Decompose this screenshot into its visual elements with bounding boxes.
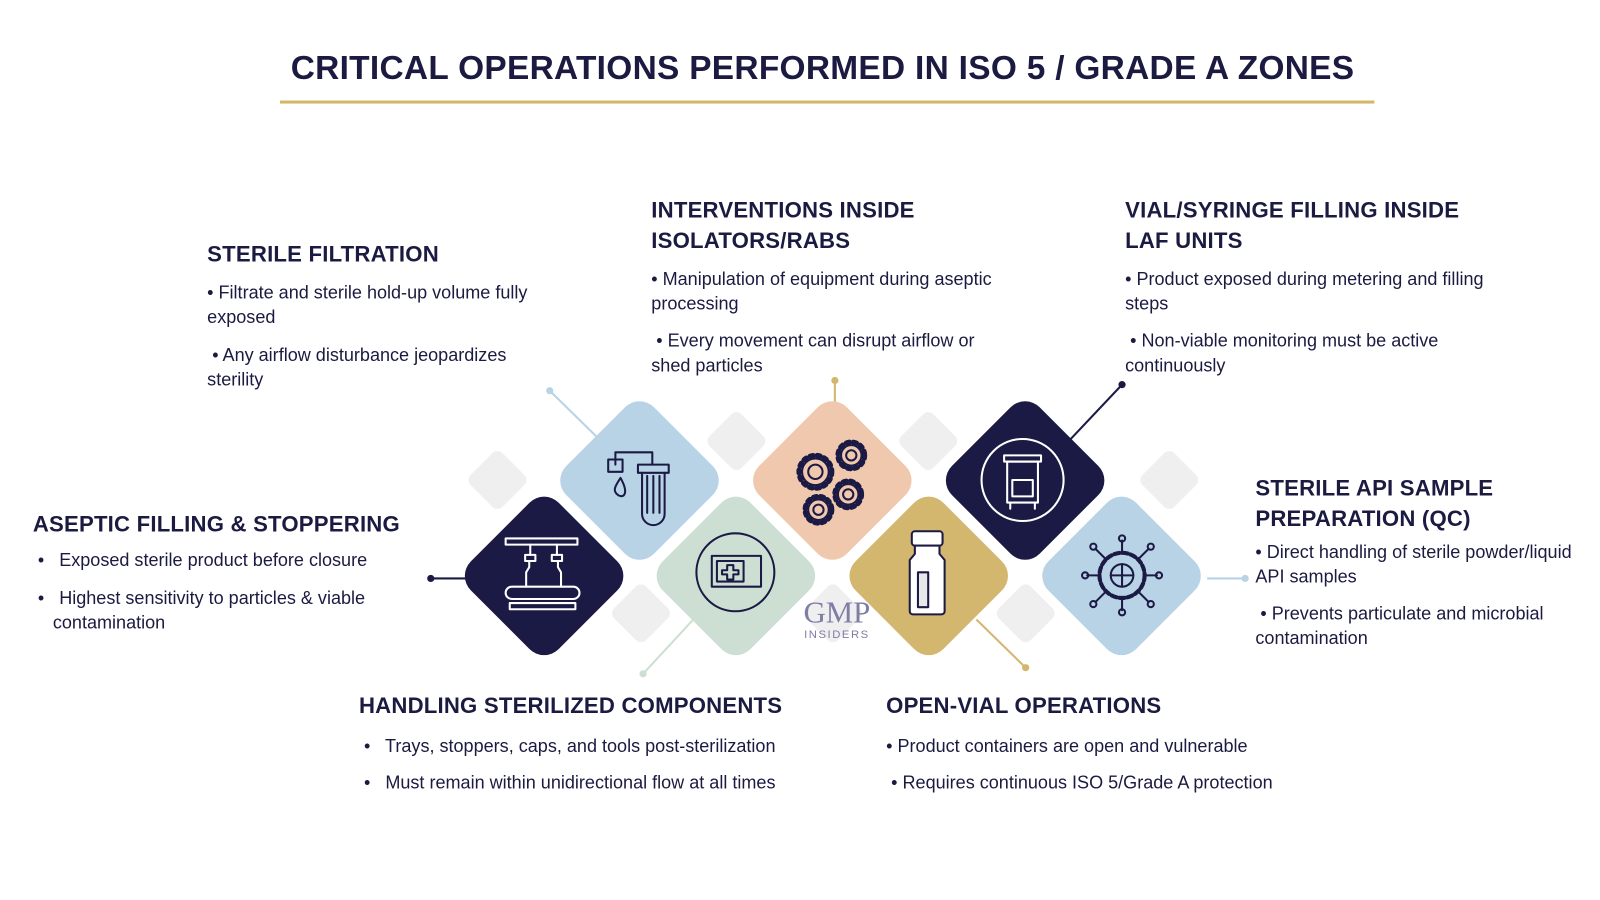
text: handling components	[359, 692, 782, 793]
icon: globe network	[1082, 535, 1162, 615]
text: sterile api: contamination	[1255, 628, 1368, 648]
icon: vial	[910, 531, 945, 614]
text: sterile filtration: sterility	[207, 369, 263, 390]
text: open-vial	[886, 692, 1273, 793]
text: open-vial: • Product containers are open and vulnerable	[886, 735, 1248, 756]
title underline	[280, 101, 1374, 104]
text: vial/syringe filling: VIAL/SYRINGE FILLING INSIDE	[1125, 197, 1459, 223]
text: vial/syringe filling: • Product exposed during metering and filling	[1125, 269, 1484, 289]
text: sterile filtration: STERILE FILTRATION	[207, 241, 439, 267]
text: interventions: INTERVENTIONS INSIDE	[651, 197, 915, 223]
diamond: handling components (green)	[648, 488, 824, 664]
text: sterile api: PREPARATION (QC)	[1255, 506, 1471, 531]
text: vial/syringe filling: steps	[1125, 293, 1168, 314]
logo: GMP Insiders: GMP	[804, 596, 870, 630]
text: sterile api: API samples	[1255, 566, 1357, 587]
diamond: vial filling LAF (navy)	[937, 393, 1113, 568]
icon: filling line	[506, 538, 579, 609]
diamond: api sample (light blue)	[1034, 488, 1209, 664]
text: interventions: • Every movement can disrupt airflow or	[656, 330, 975, 351]
text: handling components: • Trays, stoppers, caps, and tools post-sterilization	[364, 735, 775, 756]
text: sterile filtration: • Filtrate and sterile hold-up volume fully	[207, 282, 527, 303]
text: open-vial: OPEN-VIAL OPERATIONS	[886, 692, 1161, 718]
text: sterile api	[1255, 475, 1572, 648]
text: sterile api: • Prevents particulate and microbial	[1260, 603, 1544, 624]
text: vial/syringe filling: continuously	[1125, 355, 1225, 375]
text: vial/syringe filling: LAF UNITS	[1125, 228, 1243, 253]
text: open-vial: • Requires continuous ISO 5/Grade A protection	[891, 772, 1273, 793]
text: sterile filtration: exposed	[207, 307, 275, 327]
icon: LAF unit	[982, 439, 1064, 521]
logo: GMP Insiders: INSIDERS	[804, 629, 870, 641]
diamond: aseptic filling (navy)	[456, 488, 632, 664]
text: aseptic filling: • Highest sensitivity to particles & viable	[38, 588, 365, 608]
text: interventions: • Manipulation of equipment during aseptic	[651, 269, 992, 289]
text: aseptic filling: contamination	[53, 612, 165, 633]
text: vial/syringe filling: • Non-viable monitoring must be active	[1130, 330, 1438, 351]
text: sterile filtration: • Any airflow disturbance jeopardizes	[212, 345, 506, 365]
diamond: sterile filtration (light blue)	[552, 393, 727, 568]
text: vial/syringe filling	[1125, 197, 1484, 376]
diamond: interventions (peach)	[745, 393, 920, 568]
text: aseptic filling: • Exposed sterile product before closure	[38, 550, 367, 570]
text: interventions: ISOLATORS/RABS	[651, 228, 850, 253]
icon: filter	[608, 452, 669, 525]
text: handling components: • Must remain within unidirectional flow at all times	[364, 772, 775, 793]
icon: autoclave	[696, 533, 774, 611]
text: sterile api: STERILE API SAMPLE	[1255, 475, 1493, 501]
title: CRITICAL OPERATIONS PERFORMED IN ISO 5 / GRADE A ZONES	[291, 48, 1354, 86]
text: sterile api: • Direct handling of sterile powder/liquid	[1255, 542, 1572, 562]
diamond: open vial (gold)	[841, 488, 1016, 664]
text: interventions: shed particles	[651, 355, 763, 375]
text: interventions: processing	[651, 293, 739, 314]
text: handling components: HANDLING STERILIZED COMPONENTS	[359, 692, 782, 718]
text: interventions	[651, 197, 992, 376]
icon: gears	[799, 442, 865, 523]
text: aseptic filling	[33, 511, 400, 633]
text: sterile filtration	[207, 241, 528, 390]
text: aseptic filling: ASEPTIC FILLING & STOPPERING	[33, 511, 400, 536]
